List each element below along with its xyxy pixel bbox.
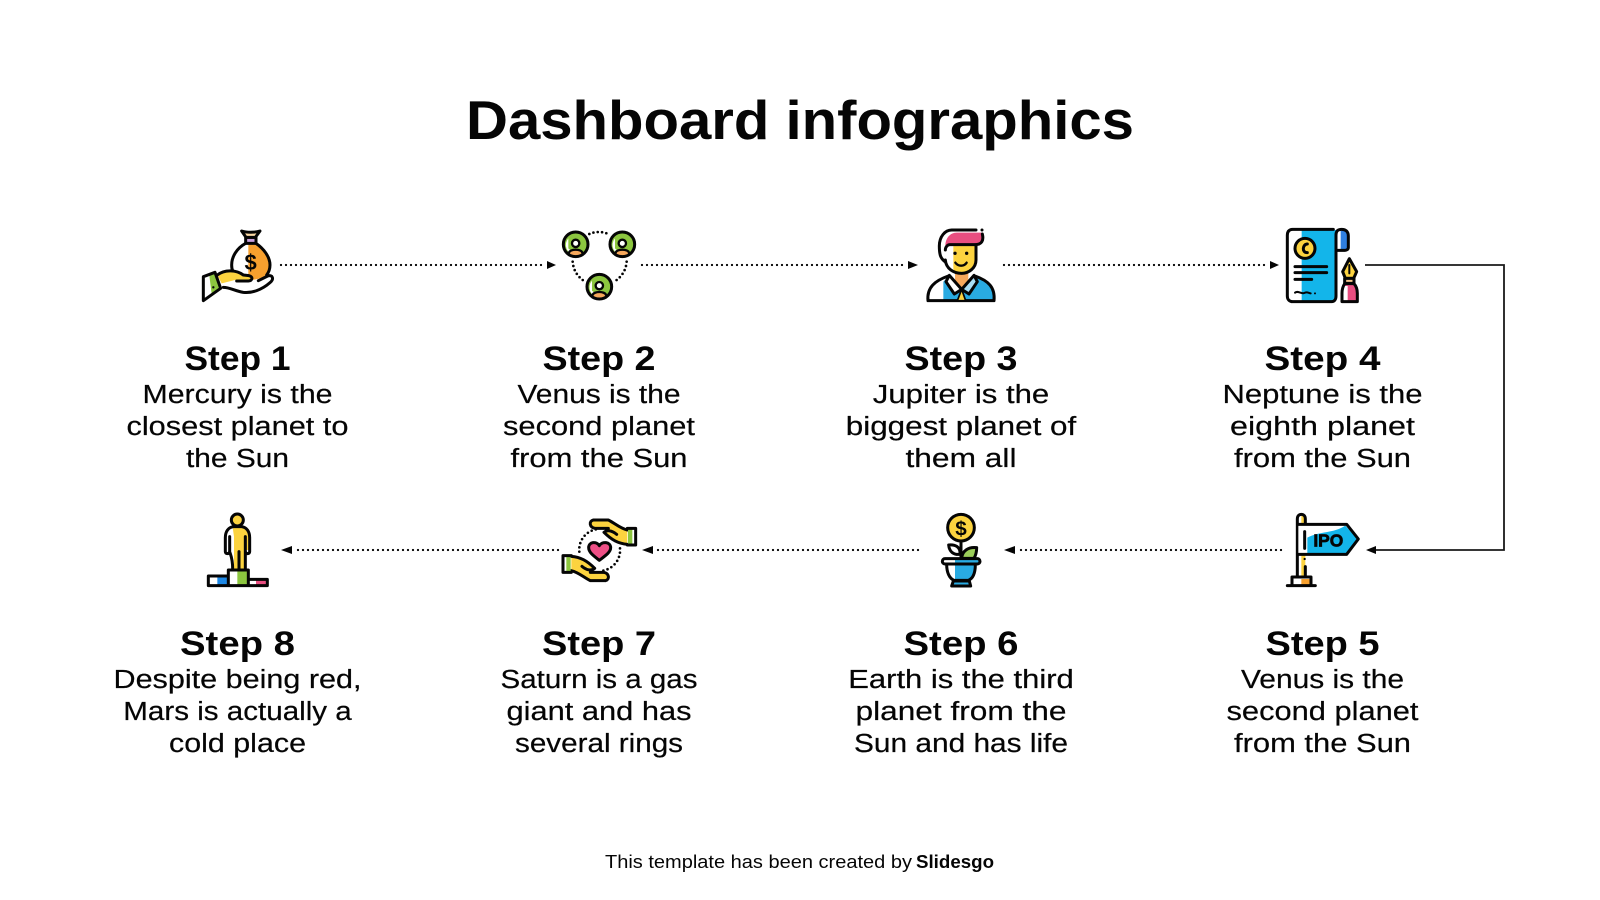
icon: connected people	[563, 232, 635, 299]
icon: contract and pen	[1287, 229, 1357, 302]
icon: money plant: $	[955, 517, 967, 540]
panel: step 8	[114, 514, 362, 758]
description	[848, 666, 1074, 758]
panel: step 7	[500, 520, 698, 758]
description: Despite being red,	[114, 666, 362, 694]
heading: Step 5	[1266, 625, 1380, 663]
description: them all	[906, 445, 1016, 473]
description	[846, 381, 1077, 473]
panel: step 5	[1226, 514, 1418, 758]
icon: money bag on hand: $	[245, 250, 257, 275]
heading: Step 7	[542, 625, 656, 663]
icon: IPO signpost: IPO	[1313, 530, 1343, 550]
description: Venus is the	[1241, 666, 1404, 694]
description: Jupiter is the	[873, 381, 1049, 409]
description	[114, 666, 362, 758]
description: Neptune is the	[1222, 381, 1422, 409]
icon: podium winner	[208, 514, 267, 586]
arrow: step 7 to step 8	[281, 546, 558, 554]
description	[1222, 381, 1422, 473]
panel: step 3	[846, 228, 1077, 473]
heading: Step 4	[1264, 340, 1381, 378]
arrow: step 1 to step 2	[281, 261, 556, 269]
description: second planet	[1226, 698, 1418, 726]
panel: step 6	[848, 514, 1074, 758]
description: planet from the	[856, 698, 1066, 726]
footer credit: Slidesgo	[916, 852, 994, 872]
description: biggest planet of	[846, 413, 1077, 441]
arrow: step 4 to step 5	[1365, 265, 1504, 554]
heading: Step 3	[904, 340, 1018, 378]
arrow: step 5 to step 6	[1004, 546, 1281, 554]
panel: step 1	[126, 231, 348, 473]
heading: Step 2	[542, 340, 656, 378]
icon: hands and heart	[563, 520, 636, 581]
description: Earth is the third	[848, 666, 1074, 694]
footer credit: This template has been created by	[605, 852, 912, 872]
description: closest planet to	[126, 413, 348, 441]
panel: step 4	[1222, 229, 1422, 473]
icon: businessman	[928, 228, 994, 301]
heading: Step 1	[184, 340, 290, 378]
arrow: step 6 to step 7	[642, 546, 918, 554]
title: Dashboard infographics	[466, 89, 1134, 151]
description: Mercury is the	[142, 381, 332, 409]
description: Venus is the	[518, 381, 680, 409]
panel: step 2	[503, 232, 695, 473]
description	[126, 381, 348, 473]
description	[1226, 666, 1418, 758]
icon: IPO signpost	[1287, 514, 1358, 586]
description: from the Sun	[1234, 730, 1411, 758]
description: the Sun	[186, 445, 289, 473]
description: from the Sun	[510, 445, 688, 473]
description: Mars is actually a	[123, 698, 353, 726]
heading: Step 6	[904, 625, 1018, 663]
arrow: step 3 to step 4	[1004, 261, 1279, 269]
icon: money plant	[942, 514, 980, 586]
description: several rings	[515, 730, 683, 758]
description: Saturn is a gas	[500, 666, 698, 694]
heading: Step 8	[180, 625, 295, 663]
arrow: step 2 to step 3	[642, 261, 918, 269]
description	[500, 666, 698, 758]
description: Sun and has life	[854, 730, 1068, 758]
description: from the Sun	[1234, 445, 1411, 473]
icon: money bag on hand	[203, 231, 272, 301]
description: second planet	[503, 413, 695, 441]
description: giant and has	[506, 698, 692, 726]
description: eighth planet	[1230, 413, 1415, 441]
description	[503, 381, 695, 473]
description: cold place	[169, 730, 306, 758]
